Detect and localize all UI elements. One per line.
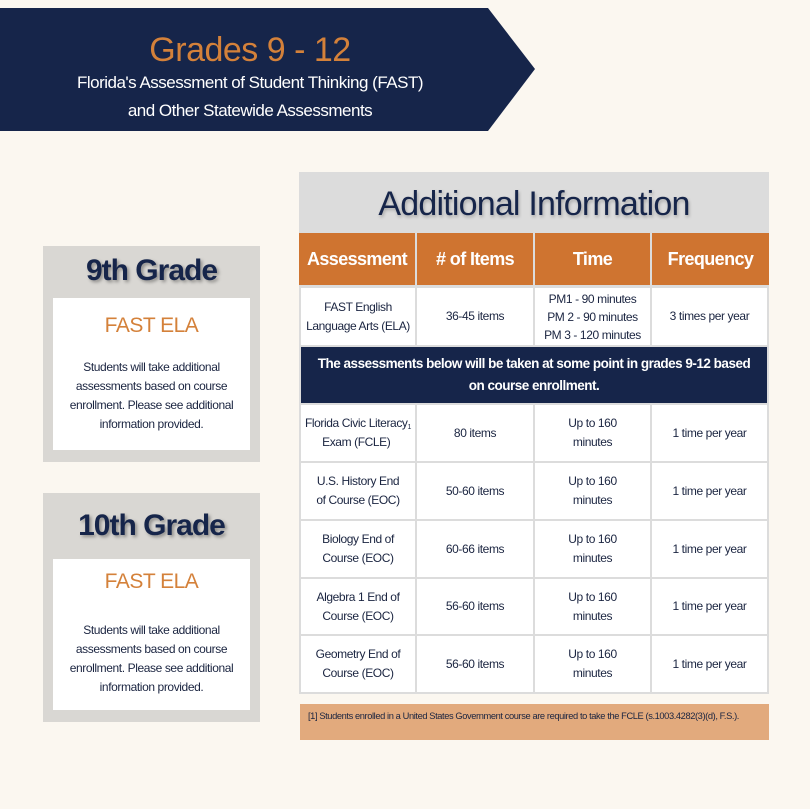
row: US History: U.S. History End	[317, 474, 399, 488]
panel: 9th grade	[43, 246, 260, 462]
row: Algebra 1: 1 time per year	[672, 599, 747, 613]
banner	[0, 8, 535, 131]
row: Biology: Biology End of	[322, 532, 394, 546]
row: Biology: 1 time per year	[672, 542, 747, 556]
title: Grades 9 - 12	[149, 30, 351, 68]
row: FAST ELA: PM 3 - 120 minutes	[544, 328, 641, 342]
row: Biology: minutes	[573, 551, 612, 565]
row: FCLE: 1	[408, 424, 411, 430]
row: FCLE: 1 time per year	[672, 426, 747, 440]
row: Geometry: Geometry End of	[316, 647, 400, 661]
row: Geometry: 56-60 items	[446, 656, 504, 670]
text: FAST ELA: FAST ELA	[105, 570, 198, 593]
footnote: [1] Students enrolled in a United States Government course are required to take the FCLE (s.1003.4282(3)(d), F.S.).	[308, 711, 739, 721]
row: Algebra 1: Algebra 1 End of	[316, 590, 400, 604]
row: FAST ELA: 36-45 items	[446, 309, 504, 323]
subtitle: and Other Statewide Assessments	[128, 101, 372, 120]
subtitle	[77, 73, 423, 120]
panel: additional information table	[299, 172, 769, 694]
text: FAST ELA: FAST ELA	[105, 314, 198, 337]
row: US History	[301, 463, 767, 519]
text block: Students will take additional assessments based on course enrollment. Please see additional information provided.	[70, 623, 233, 694]
banner row note	[301, 347, 767, 403]
heading: 10th grade: 10th Grade	[78, 509, 225, 542]
row: Geometry: minutes	[573, 666, 612, 680]
table header: # of Items	[436, 248, 514, 268]
footnote	[300, 704, 769, 740]
row: Algebra 1: 56-60 items	[446, 599, 504, 613]
row: US History: 50-60 items	[446, 484, 504, 498]
row: FCLE: Florida Civic Literacy	[305, 416, 408, 430]
row: FAST ELA: PM 2 - 90 minutes	[547, 310, 638, 324]
row: US History: 1 time per year	[672, 484, 747, 498]
row: Algebra 1	[301, 579, 767, 634]
row: Geometry	[301, 636, 767, 692]
row: Algebra 1: Up to 160	[568, 590, 617, 604]
row: Biology	[301, 521, 767, 577]
row: FAST ELA: FAST English	[324, 300, 392, 314]
row: FAST ELA: 3 times per year	[670, 309, 749, 323]
row: Biology: Course (EOC)	[322, 551, 394, 565]
heading: Additional Information	[378, 184, 690, 222]
row: Biology: Up to 160	[568, 532, 617, 546]
row: FCLE: Up to 160	[568, 416, 617, 430]
table header: Time	[573, 248, 612, 268]
subtitle: Florida's Assessment of Student Thinking (FAST)	[77, 73, 423, 92]
row: Algebra 1: Course (EOC)	[322, 608, 394, 622]
panel: 10th grade	[43, 493, 260, 722]
table header: Frequency	[668, 248, 753, 268]
heading: 9th grade: 9th Grade	[86, 254, 217, 287]
row: Geometry: Course (EOC)	[322, 666, 394, 680]
table header	[299, 233, 769, 285]
row: US History: of Course (EOC)	[316, 493, 400, 507]
text block: Students will take additional assessments based on course enrollment. Please see additional information provided.	[70, 360, 233, 431]
row: Algebra 1: minutes	[573, 608, 612, 622]
row: US History: Up to 160	[568, 474, 617, 488]
banner row note: The assessments below will be taken at some point in grades 9-12 based on course enrollment.	[318, 356, 750, 393]
row: Geometry: Up to 160	[568, 647, 617, 661]
row: FAST ELA: Language Arts (ELA)	[306, 318, 410, 332]
row: Geometry: 1 time per year	[672, 656, 747, 670]
table header: Assessment	[307, 248, 407, 268]
row: Biology: 60-66 items	[446, 542, 504, 556]
row: FCLE	[301, 405, 767, 461]
row: FAST ELA	[301, 288, 767, 345]
row: FCLE: 80 items	[454, 426, 496, 440]
row: FCLE: Exam (FCLE)	[322, 435, 390, 449]
row: US History: minutes	[573, 493, 612, 507]
row: FCLE: minutes	[573, 435, 612, 449]
row: FAST ELA: PM1 - 90 minutes	[549, 292, 636, 306]
